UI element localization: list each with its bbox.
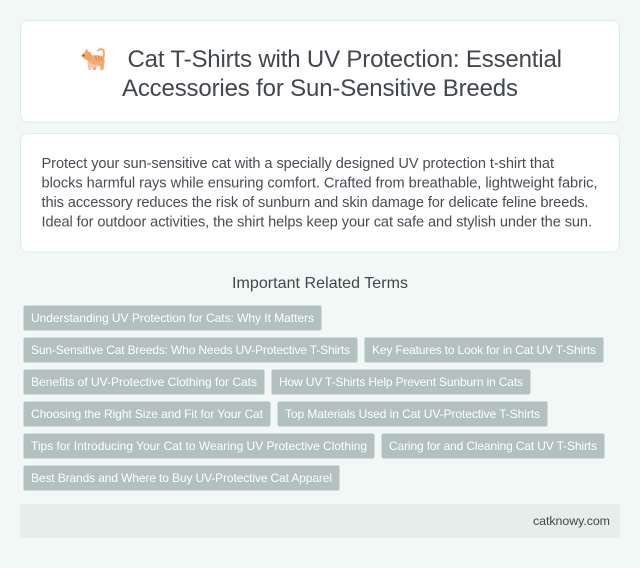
footer site name: catknowy.com [533, 514, 610, 528]
tag: size and fit [24, 402, 270, 426]
icon: orange cat [81, 48, 105, 70]
tag: sunburn prevention: How UV T-Shirts Help Prevent Sunburn in Cats [279, 375, 523, 389]
tag: understanding UV protection [24, 306, 322, 330]
intro paragraph [42, 156, 598, 230]
intro paragraph: Ideal for outdoor activities, the shirt helps keep your cat safe and stylish under the sun. [42, 214, 592, 230]
intro paragraph: blocks harmful rays while ensuring comfort. Crafted from breathable, lightweight fabric, [42, 176, 598, 192]
tag: key features: Key Features to Look for in Cat UV T-Shirts [372, 343, 596, 357]
tag: size and fit: Choosing the Right Size and Fit for Your Cat [31, 407, 264, 421]
heading: important related terms: Important Related Terms [232, 275, 408, 292]
panel: related term tags [24, 306, 604, 490]
footer bar [20, 504, 620, 538]
tag: sun-sensitive breeds: Sun-Sensitive Cat Breeds: Who Needs UV-Protective T-Shirts [31, 343, 350, 357]
title text: Cat T-Shirts with UV Protection: Essential [128, 46, 562, 73]
tag: benefits [24, 370, 264, 394]
tag: top materials [278, 402, 548, 426]
tag: introducing clothing [24, 434, 374, 458]
tag: key features [364, 338, 604, 362]
tag: caring and cleaning [382, 434, 604, 458]
tag: caring and cleaning: Caring for and Cleaning Cat UV T-Shirts [389, 439, 597, 453]
tag: benefits: Benefits of UV-Protective Clothing for Cats [31, 375, 257, 389]
tag: understanding UV protection: Understanding UV Protection for Cats: Why It Matters [31, 311, 314, 325]
intro paragraph: Protect your sun-sensitive cat with a specially designed UV protection t-shirt that [42, 156, 554, 172]
panel: intro text card [20, 134, 620, 252]
tag: best brands [24, 466, 340, 490]
tag: best brands: Best Brands and Where to Buy UV-Protective Cat Apparel [31, 471, 332, 485]
tag: top materials: Top Materials Used in Cat UV-Protective T-Shirts [285, 407, 540, 421]
tag: introducing clothing: Tips for Introducing Your Cat to Wearing UV Protective Clothing [31, 439, 367, 453]
panel: title card [20, 20, 620, 122]
intro paragraph: this accessory reduces the risk of sunburn and skin damage for delicate feline breeds. [42, 195, 588, 211]
title text: Accessories for Sun-Sensitive Breeds [122, 75, 518, 102]
tag: sunburn prevention [272, 370, 530, 394]
tag: sun-sensitive breeds [24, 338, 358, 362]
title text [122, 46, 562, 102]
